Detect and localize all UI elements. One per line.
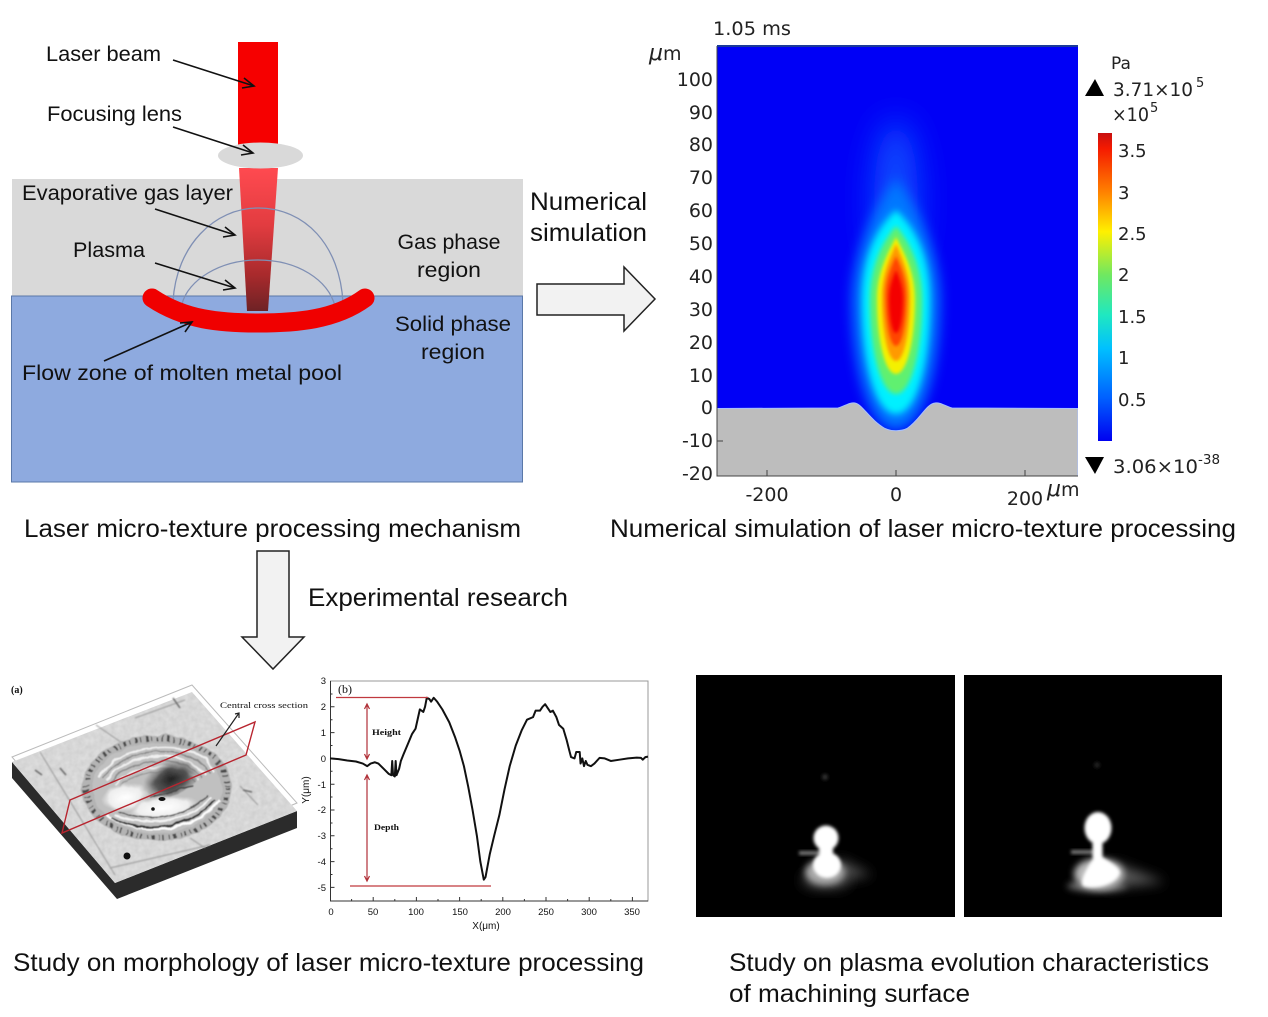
y axis tick labels: 2 xyxy=(321,702,326,713)
plasma dome xyxy=(182,260,335,306)
arrow: laser beam xyxy=(173,60,254,88)
caption: plasma evolution study: of machining surface xyxy=(729,980,970,1008)
arrow: focusing lens xyxy=(173,127,253,155)
x axis tick labels: 250 xyxy=(538,907,554,918)
x axis tick labels: 50 xyxy=(368,907,378,918)
central cross section arrow xyxy=(216,713,239,746)
label: evaporative gas layer: Evaporative gas layer xyxy=(22,182,233,205)
x axis tick labels: 100 xyxy=(408,907,424,918)
y axis tick labels: -1 xyxy=(318,780,326,791)
y axis labels: 100 xyxy=(677,69,713,91)
y axis labels: 10 xyxy=(689,365,713,387)
x axis unit: μm xyxy=(1046,477,1080,502)
min marker xyxy=(1085,457,1104,474)
crater pits xyxy=(124,797,166,860)
plasma core xyxy=(1082,812,1120,887)
far spark xyxy=(822,774,828,780)
focused laser cone xyxy=(239,168,278,311)
x axis labels: 0 xyxy=(890,484,902,506)
scale factor exponent: 5 xyxy=(1150,101,1158,116)
colour bar labels: 2.5 xyxy=(1118,224,1147,245)
time label: 1.05 ms xyxy=(713,18,791,40)
x axis tick labels: 300 xyxy=(581,907,597,918)
x axis title: X(μm) xyxy=(472,921,500,932)
label height: Height xyxy=(372,728,401,737)
depth arrow xyxy=(364,775,370,881)
colour bar labels xyxy=(1118,141,1147,411)
x axis tick labels: 0 xyxy=(328,907,334,918)
y axis tick labels xyxy=(318,676,326,894)
arrow: to experimental research xyxy=(242,551,304,669)
chart frame xyxy=(330,681,648,901)
y axis tick labels: -3 xyxy=(318,831,326,842)
solid ground surface xyxy=(717,403,1078,476)
label: solid phase region line two: region xyxy=(421,341,485,364)
solid phase region xyxy=(12,296,522,482)
caption: plasma evolution study xyxy=(729,949,1209,1008)
block bounding outline xyxy=(12,685,297,878)
plot frame xyxy=(717,46,1078,476)
max value: 3.71×10 xyxy=(1113,79,1193,101)
crater xyxy=(82,735,232,841)
label: numerical simulation xyxy=(530,188,647,247)
y axis unit: μm xyxy=(648,41,682,66)
x axis tick labels: 150 xyxy=(452,907,468,918)
colour bar labels: 1 xyxy=(1118,348,1129,369)
caption: morphology study: Study on morphology of laser micro-texture processing xyxy=(13,949,644,977)
label: focusing lens: Focusing lens xyxy=(47,103,182,126)
scale factor: ×10 xyxy=(1112,104,1149,126)
label: solid phase region: Solid phase xyxy=(395,313,511,336)
x axis labels: -200 xyxy=(745,484,789,506)
y axis labels: 70 xyxy=(689,167,713,189)
height and depth reference lines xyxy=(336,698,491,886)
label: laser beam: Laser beam xyxy=(46,43,161,66)
plasma glow xyxy=(802,871,850,889)
y axis title: Y(μm) xyxy=(301,776,312,804)
label: experimental research: Experimental research xyxy=(308,584,568,612)
x axis tick labels: 200 xyxy=(495,907,511,918)
panel: numerical simulation chart xyxy=(648,18,1220,510)
colour bar xyxy=(1098,133,1112,441)
label: gas phase region line two: region xyxy=(417,259,481,282)
label: numerical simulation: simulation xyxy=(530,219,647,247)
y axis labels: -20 xyxy=(682,463,713,485)
profile curve xyxy=(330,698,648,880)
max marker xyxy=(1085,79,1104,96)
y axis labels: 40 xyxy=(689,266,713,288)
plasma core xyxy=(813,826,841,878)
y axis labels: -10 xyxy=(682,430,713,452)
plasma glow xyxy=(1067,880,1127,892)
min value: 3.06×10 xyxy=(1113,456,1198,478)
pressure field plot xyxy=(717,46,1078,476)
label: numerical simulation: Numerical xyxy=(530,188,647,216)
y axis labels xyxy=(677,69,713,485)
x axis tick labels: 350 xyxy=(624,907,640,918)
block side faces xyxy=(12,762,297,899)
y axis labels: 20 xyxy=(689,332,713,354)
panel: laser micro-texture processing mechanism diagram xyxy=(12,42,523,482)
x axis labels xyxy=(745,484,1043,510)
arrow: evaporative gas layer xyxy=(155,209,235,237)
colour bar labels: 0.5 xyxy=(1118,390,1147,411)
chart axes and ticks xyxy=(330,681,648,901)
y axis tick labels: 0 xyxy=(321,754,326,765)
colour bar labels: 2 xyxy=(1118,265,1129,286)
label: plasma: Plasma xyxy=(73,239,145,262)
x axis tick labels xyxy=(328,907,640,918)
panel: plasma image right xyxy=(964,675,1222,917)
min value exponent: -38 xyxy=(1198,452,1220,468)
label depth: Depth xyxy=(374,823,400,832)
central cross section plane xyxy=(62,722,255,833)
focusing lens xyxy=(218,142,303,168)
panel: cross-section profile chart xyxy=(301,676,648,932)
panel: plasma image left xyxy=(696,675,955,917)
max value exponent: 5 xyxy=(1196,76,1204,91)
colour bar labels: 3.5 xyxy=(1118,141,1147,162)
label: gas phase region: Gas phase xyxy=(398,231,500,254)
y axis tick labels: 3 xyxy=(321,676,326,687)
y axis tick labels: -5 xyxy=(318,883,326,894)
central cross section label: Central cross section xyxy=(220,700,309,710)
caption: plasma evolution study: Study on plasma evolution characteristics xyxy=(729,949,1209,977)
colour bar labels: 3 xyxy=(1118,183,1129,204)
arrow: to numerical simulation xyxy=(537,267,655,331)
y axis tick labels: 1 xyxy=(321,728,326,739)
y axis labels: 80 xyxy=(689,134,713,156)
label b: (b) xyxy=(338,682,352,696)
arrow: plasma xyxy=(155,263,235,290)
molten metal pool xyxy=(152,298,365,323)
height arrow xyxy=(364,704,370,759)
unit label Pa: Pa xyxy=(1111,54,1131,74)
y axis tick labels: -2 xyxy=(318,805,326,816)
y axis tick labels: -4 xyxy=(318,857,326,868)
panel: 3D crater morphology xyxy=(11,685,309,899)
y axis labels: 50 xyxy=(689,233,713,255)
surface scratches and pits xyxy=(35,698,258,875)
colour bar labels: 1.5 xyxy=(1118,307,1147,328)
block top surface xyxy=(12,692,297,883)
evaporative gas layer dome xyxy=(173,208,343,303)
caption: numerical simulation: Numerical simulation of laser micro-texture processing xyxy=(610,515,1236,543)
x axis labels: 200 xyxy=(1007,488,1043,510)
y axis labels: 90 xyxy=(689,102,713,124)
gas phase region xyxy=(12,179,523,296)
caption: mechanism: Laser micro-texture processing mechanism xyxy=(24,515,521,543)
arrow: molten pool xyxy=(104,322,192,361)
y axis labels: 0 xyxy=(701,397,713,419)
label: flow zone: Flow zone of molten metal pool xyxy=(22,362,342,385)
y axis labels: 60 xyxy=(689,200,713,222)
laser beam xyxy=(238,42,278,146)
label a: (a) xyxy=(11,685,23,696)
far spark xyxy=(1094,762,1100,768)
y axis labels: 30 xyxy=(689,299,713,321)
